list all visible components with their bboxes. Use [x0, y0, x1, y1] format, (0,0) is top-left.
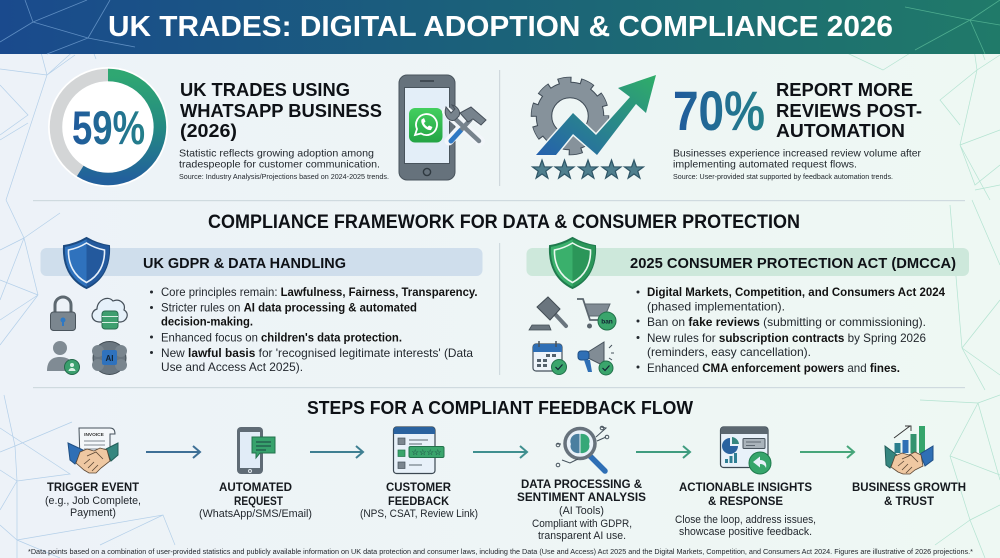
label: TRIGGER EVENT	[47, 480, 140, 494]
icon: shopping cart with ban	[577, 299, 616, 330]
bullet list: Use and Access Act 2025).	[161, 360, 303, 374]
description: Source: Industry Analysis/Projections based on 2024-2025 trends.	[179, 172, 389, 181]
heading: compliance framework: COMPLIANCE FRAMEWORK FOR DATA & CONSUMER PROTECTION	[208, 211, 800, 233]
icon: padlock	[50, 297, 76, 330]
label	[852, 480, 966, 508]
icon: invoice handshake: INVOICE	[84, 432, 105, 438]
heading: (2026)	[180, 120, 237, 141]
description: Source: User-provided stat supported by feedback automation trends.	[673, 172, 893, 181]
arrow 1	[146, 446, 200, 458]
panel: review automation statistic	[532, 75, 922, 181]
label: Compliant with GDPR,	[532, 518, 632, 530]
step 3: customer feedback	[360, 427, 478, 520]
label: (AI Tools)	[559, 505, 604, 517]
label: transparent AI use.	[538, 530, 626, 542]
label: AUTOMATED	[219, 480, 292, 494]
icon: phone with message	[237, 427, 275, 474]
bullet list: (reminders, easy cancellation).	[647, 345, 811, 359]
icon: cloud database	[92, 298, 127, 329]
icon: shopping cart with ban: ban	[601, 318, 613, 326]
description: implementing automated request flows.	[673, 158, 857, 170]
label: Payment)	[70, 507, 116, 519]
icon: blue shield	[64, 238, 109, 288]
icon: phone with WhatsApp and tools	[399, 75, 487, 180]
arrow 4	[636, 446, 690, 458]
label	[517, 479, 646, 542]
label: REQUEST	[234, 494, 284, 508]
panel: WhatsApp statistic	[48, 67, 487, 187]
description: Businesses experience increased review volume after	[673, 148, 921, 160]
header banner	[0, 0, 1000, 54]
icon: green shield	[550, 238, 595, 288]
label: showcase positive feedback.	[679, 526, 812, 538]
icon: user with badge	[47, 341, 80, 374]
step 6: business growth	[852, 426, 966, 508]
heading band	[40, 248, 482, 276]
heading: feedback flow: STEPS FOR A COMPLIANT FEEDBACK FLOW	[307, 397, 694, 418]
arrow 5	[800, 446, 854, 458]
bullet list	[636, 285, 945, 375]
label: BUSINESS GROWTH	[852, 480, 966, 494]
bullet list: decision-making.	[161, 314, 253, 328]
title: UK TRADES: DIGITAL ADOPTION & COMPLIANCE 2026	[108, 11, 893, 43]
bullet list: (phased implementation).	[647, 300, 785, 314]
panel: UK GDPR	[40, 238, 482, 374]
heading	[180, 79, 382, 141]
heading: UK TRADES USING	[180, 79, 350, 100]
arrow 2	[310, 446, 363, 458]
heading	[776, 79, 922, 141]
donut chart: 59%: 59%	[72, 101, 145, 154]
bullet list: Enhanced focus on children's data protection.	[161, 330, 402, 344]
big number: 70%: 70%	[673, 79, 765, 142]
icon: magnifier with brain	[556, 426, 609, 471]
label	[675, 480, 816, 538]
label: SENTIMENT ANALYSIS	[517, 492, 646, 504]
heading band: 2025 CONSUMER PROTECTION ACT (DMCCA)	[630, 255, 956, 272]
icon: feedback form: ☆☆☆☆	[412, 448, 442, 457]
bullet list: Ban on fake reviews (submitting or commissioning).	[647, 315, 926, 329]
icon: megaphone with check	[578, 342, 614, 375]
label	[199, 480, 312, 520]
label: FEEDBACK	[388, 494, 449, 508]
description: Statistic reflects growing adoption among	[179, 148, 374, 160]
description: tradespeople for customer communication.	[179, 158, 380, 170]
heading band: UK GDPR & DATA HANDLING	[143, 255, 346, 272]
heading: REVIEWS POST-	[776, 100, 922, 121]
bullet list: Core principles remain: Lawfulness, Fairness, Transparency.	[161, 285, 478, 299]
label: DATA PROCESSING &	[521, 479, 642, 491]
label: ACTIONABLE INSIGHTS	[679, 480, 812, 494]
icon: AI brain: AI	[106, 354, 114, 363]
icon: AI brain	[92, 342, 127, 374]
icon: growth handshake	[885, 426, 933, 474]
bullet list: New lawful basis for 'recognised legitimate interests' (Data	[161, 346, 473, 360]
arrow 3	[473, 446, 527, 458]
label	[45, 480, 141, 519]
donut chart: 59%	[48, 67, 168, 187]
label	[360, 480, 478, 520]
bullet list: New rules for subscription contracts by Spring 2026	[647, 331, 926, 345]
label: & RESPONSE	[708, 494, 783, 508]
step 4: data processing	[517, 426, 646, 542]
description	[179, 148, 389, 181]
label: & TRUST	[884, 494, 935, 508]
step 5: actionable insights	[675, 427, 816, 538]
bullet list: Stricter rules on AI data processing & automated	[161, 300, 417, 314]
label: Close the loop, address issues,	[675, 514, 816, 526]
bullet list	[150, 285, 478, 374]
step 1: trigger event	[45, 428, 141, 519]
icon: gear with rising arrow and stars	[532, 75, 656, 178]
label: (NPS, CSAT, Review Link)	[360, 508, 478, 520]
heading band	[526, 248, 969, 276]
icon: gavel	[529, 297, 566, 330]
label: CUSTOMER	[386, 480, 451, 494]
icon: calendar with check	[533, 341, 566, 374]
label: (e.g., Job Complete,	[45, 495, 141, 507]
bullet list: Digital Markets, Competition, and Consumers Act 2024	[647, 285, 945, 299]
bullet list: Enhanced CMA enforcement powers and fines.	[647, 361, 900, 375]
description	[673, 148, 921, 181]
heading: AUTOMATION	[776, 120, 905, 141]
icon: dashboard with reply	[720, 427, 771, 474]
label: (WhatsApp/SMS/Email)	[199, 508, 312, 520]
panel: consumer protection act	[526, 238, 969, 375]
footnote: *Data points based on a combination of user-provided statistics and publicly available information on UK data protection and consumer laws, including the Data (Use and Access) Act 2025 and the Digital Markets, Competition, and Consumers Act 2024. Figures are illustrative of 2026 projections.*	[28, 547, 973, 556]
heading: REPORT MORE	[776, 79, 913, 100]
step 2: automated request	[199, 427, 312, 520]
heading: WHATSAPP BUSINESS	[180, 100, 382, 121]
